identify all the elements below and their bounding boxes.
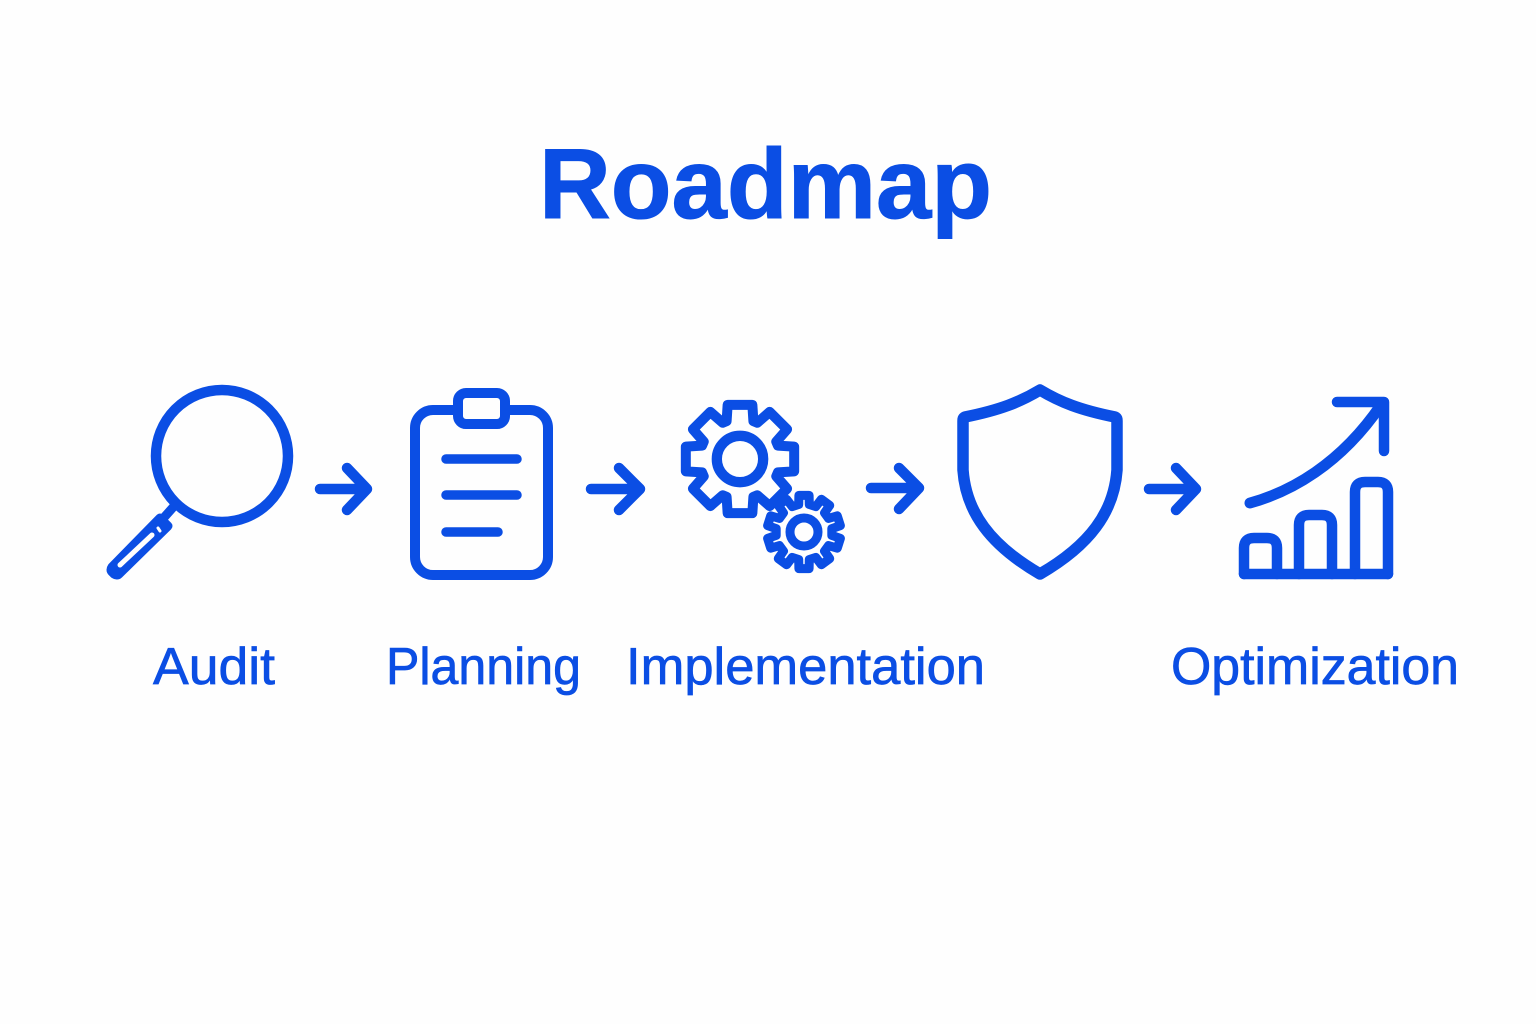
arrow: security to optimization [1149, 468, 1196, 510]
label: planning: Planning [386, 638, 581, 696]
icon: growth chart [1244, 402, 1388, 574]
icon: clipboard [415, 393, 548, 575]
icon: magnifying glass [111, 390, 288, 575]
icon: shield [963, 390, 1117, 574]
arrow: implementation to security [871, 468, 919, 509]
title: Roadmap [539, 128, 992, 239]
label: optimization: Optimization [1171, 638, 1459, 696]
arrow: audit to planning [320, 468, 367, 510]
label: audit: Audit [153, 638, 276, 696]
arrow: planning to implementation [591, 468, 640, 510]
label: implementation: Implementation [626, 638, 985, 696]
icon: gears [686, 405, 840, 569]
